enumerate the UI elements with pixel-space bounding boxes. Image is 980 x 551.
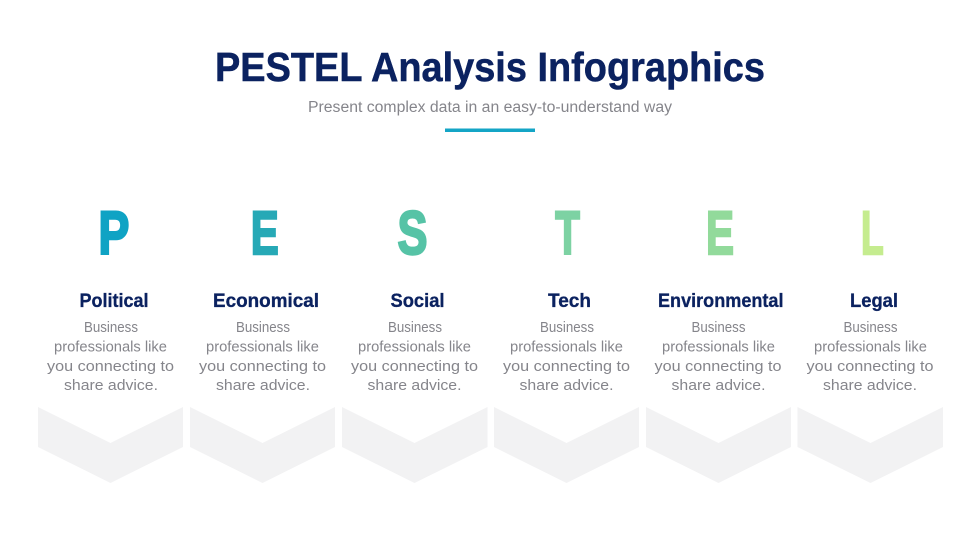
description	[199, 320, 326, 394]
chevron	[798, 407, 943, 483]
subtitle: Present complex data in an easy-to-understand way	[308, 99, 672, 116]
description: you connecting to	[654, 359, 782, 375]
column: Economical	[190, 199, 335, 483]
description: share advice.	[216, 378, 310, 394]
heading: Tech: Tech	[548, 291, 591, 312]
description: share advice.	[823, 378, 917, 394]
letter T: T	[555, 199, 580, 268]
description: share advice.	[368, 378, 462, 394]
description	[351, 320, 478, 394]
title: PESTEL Analysis Infographics	[215, 44, 765, 90]
description: professionals like	[54, 340, 167, 356]
chevron	[342, 407, 488, 483]
description: professionals like	[662, 340, 775, 356]
description	[47, 320, 174, 394]
description: professionals like	[814, 340, 927, 356]
title accent bar	[445, 128, 535, 132]
description: professionals like	[510, 340, 623, 356]
chevron	[646, 407, 791, 483]
description: Business	[388, 320, 442, 336]
description: Business	[236, 320, 290, 336]
letter E: E	[251, 199, 279, 268]
description	[806, 320, 934, 394]
heading: Environmental: Environmental	[658, 291, 784, 312]
chevron	[38, 407, 183, 483]
heading: Political: Political	[80, 291, 148, 312]
description: you connecting to	[199, 359, 326, 375]
description: Business	[84, 320, 138, 336]
description: you connecting to	[47, 359, 174, 375]
heading: Legal: Legal	[850, 291, 898, 312]
description: Business	[540, 320, 594, 336]
letter E: E	[706, 199, 734, 268]
letter S: S	[398, 199, 428, 268]
description: share advice.	[672, 378, 766, 394]
description: you connecting to	[503, 359, 630, 375]
description: share advice.	[64, 378, 158, 394]
heading: Social: Social	[390, 291, 444, 312]
chevron	[494, 407, 639, 483]
chevron	[190, 407, 335, 483]
column: Social	[342, 199, 488, 483]
description: you connecting to	[806, 359, 934, 375]
letter L: L	[861, 199, 884, 268]
column: Legal	[798, 199, 943, 483]
description	[503, 320, 630, 394]
description: Business	[692, 320, 746, 336]
description: professionals like	[206, 340, 319, 356]
column: Tech	[494, 199, 639, 483]
heading: Economical: Economical	[213, 291, 319, 312]
description: share advice.	[520, 378, 614, 394]
letter P: P	[98, 199, 129, 268]
description	[654, 320, 782, 394]
column: Political	[38, 199, 183, 483]
description: you connecting to	[351, 359, 478, 375]
description: Business	[844, 320, 898, 336]
column: Environmental	[646, 199, 791, 483]
description: professionals like	[358, 340, 471, 356]
